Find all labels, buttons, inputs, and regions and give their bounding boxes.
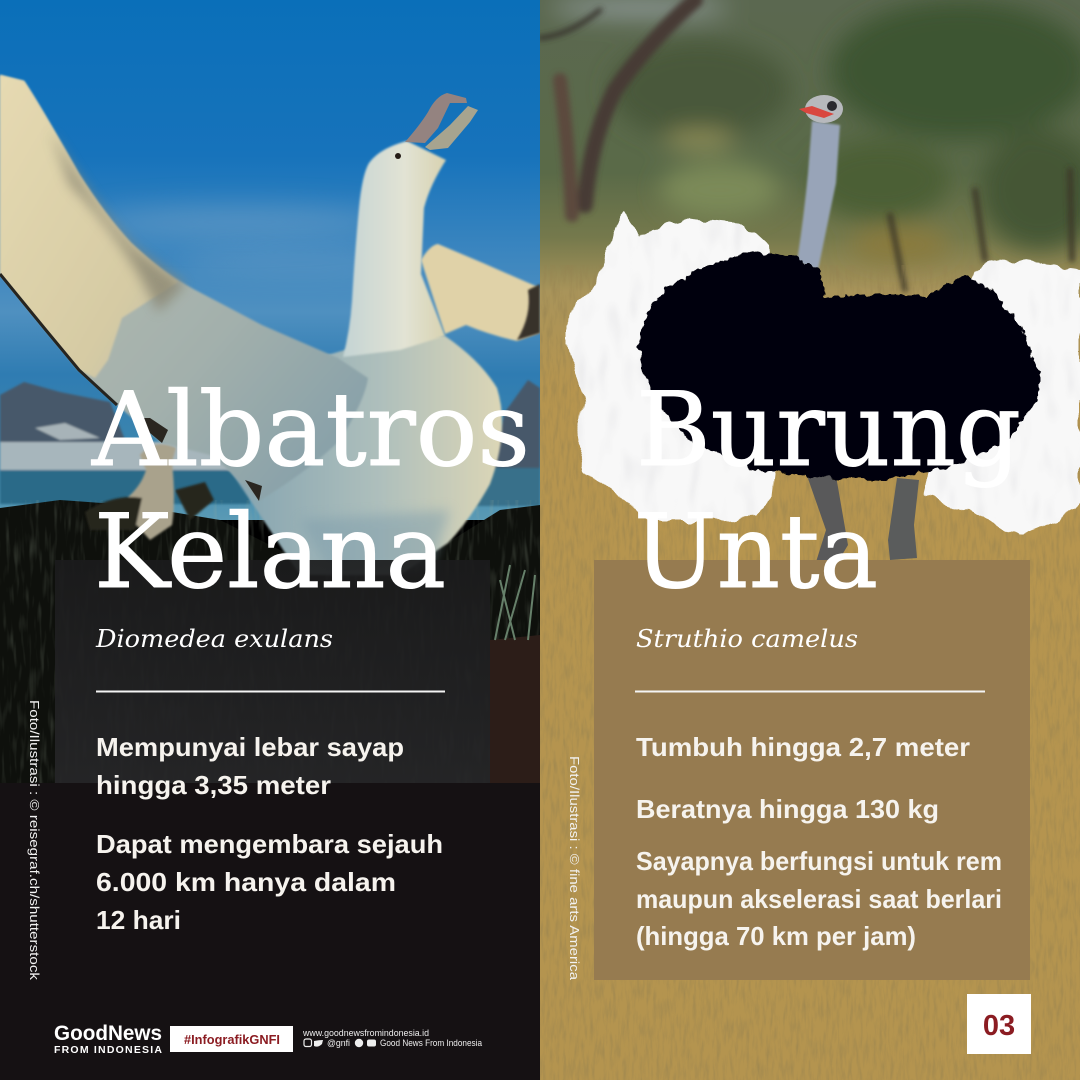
- black plumage: [638, 252, 1040, 480]
- panel: ostrich text box: [594, 560, 1030, 980]
- dry grass texture: [540, 265, 1080, 1080]
- white feathers: [566, 212, 1080, 535]
- panel: ostrich photo: [540, 0, 1080, 1080]
- footer logo: FROM INDONESIA: [54, 1044, 162, 1056]
- footer logo: [54, 1022, 162, 1056]
- grass ground: [0, 500, 540, 790]
- hashtag tag: #InfografikGNFI: [184, 1032, 280, 1047]
- tree trunks: [540, 0, 1072, 290]
- panel: albatross photo: [0, 0, 540, 1080]
- hashtag tag: [170, 1026, 293, 1052]
- title: Burung Unta: [634, 371, 1021, 612]
- text block: albatross facts: [96, 732, 443, 935]
- mountains: [0, 380, 540, 506]
- text block: albatross facts: Dapat mengembara sejauh: [96, 829, 443, 859]
- title: Burung Unta: Burung: [636, 371, 1021, 490]
- scientific name: ostrich: Struthio camelus: [636, 625, 858, 653]
- text block: ostrich facts: Sayapnya berfungsi untuk rem: [636, 846, 1002, 876]
- photo credit: albatross: Foto/Ilustrasi : © reisegraf.ch/shutterstock: [27, 700, 42, 981]
- lower black panel: [0, 783, 540, 1080]
- text block: ostrich facts: [636, 732, 1002, 951]
- title: Albatros Kelana: [91, 371, 530, 612]
- page number: 03: [983, 1010, 1015, 1042]
- text block: albatross facts: 12 hari: [96, 905, 181, 935]
- text block: albatross facts: 6.000 km hanya dalam: [96, 867, 396, 897]
- small albatross: [85, 444, 214, 540]
- text block: ostrich facts: Beratnya hingga 130 kg: [636, 794, 939, 824]
- text block: albatross facts: Mempunyai lebar sayap: [96, 732, 404, 762]
- page number: [967, 994, 1031, 1054]
- title: Burung Unta: Unta: [634, 493, 878, 612]
- footer links and social icons: www.goodnewsfromindonesia.id: [302, 1028, 429, 1039]
- blurred trees: [550, 0, 1080, 263]
- text block: ostrich facts: (hingga 70 km per jam): [636, 921, 916, 951]
- text block: ostrich facts: maupun akselerasi saat berlari: [636, 884, 1002, 914]
- text block: ostrich facts: Tumbuh hingga 2,7 meter: [636, 732, 970, 762]
- title: Albatros Kelana: Albatros: [91, 371, 530, 490]
- neck and head: [797, 95, 843, 270]
- footer logo: GoodNews: [54, 1022, 162, 1045]
- panel: albatross text box: [55, 560, 490, 783]
- photo credit: ostrich: Foto/Ilustrasi : © fine arts America: [567, 756, 582, 981]
- footer links and social icons: @gnfi: [327, 1038, 350, 1049]
- albatross body and wings: [0, 75, 540, 575]
- footer links and social icons: Good News From Indonesia: [380, 1038, 483, 1049]
- legs: [808, 475, 919, 560]
- text block: albatross facts: hingga 3,35 meter: [96, 770, 331, 800]
- footer links and social icons: [302, 1028, 483, 1049]
- scientific name: albatross: Diomedea exulans: [95, 625, 333, 653]
- title: Albatros Kelana: Kelana: [94, 493, 446, 612]
